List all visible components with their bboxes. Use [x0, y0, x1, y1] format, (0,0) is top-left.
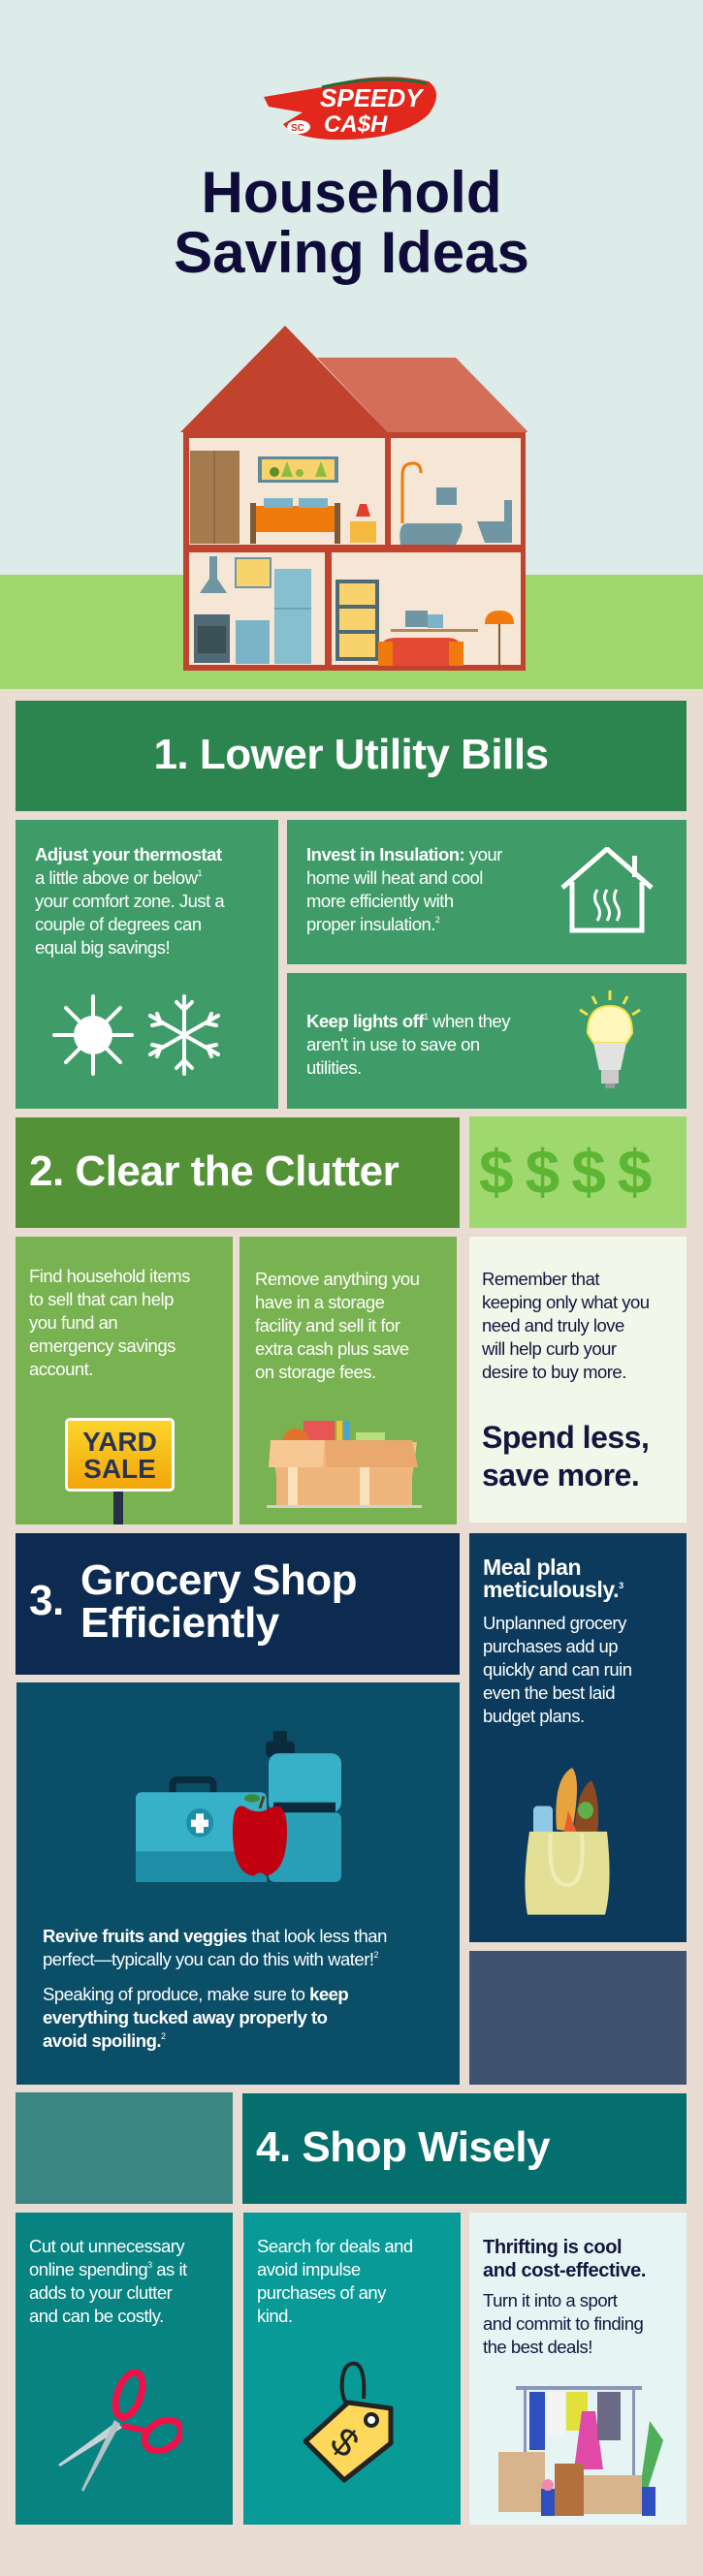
card: deals: purchases of any — [257, 2282, 386, 2303]
card: sell items: Find household items — [29, 1266, 190, 1286]
section 2 heading: 2. Clear the Clutter — [29, 1147, 399, 1195]
card: revive produce: perfect—typically you can do this with water!2 — [43, 1949, 378, 1969]
icon: clothes rack and boxes — [498, 2386, 663, 2516]
card: thrifting: Thrifting is cool — [483, 2237, 622, 2258]
card: storage: Remove anything you — [255, 1269, 419, 1289]
card: insulation: Invest in Insulation: your — [306, 844, 502, 864]
card: meal plan: purchases add up — [483, 1636, 618, 1656]
top sky background — [0, 0, 703, 575]
card: meal plan: Meal plan — [483, 1555, 581, 1580]
card: storage: facility and sell it for — [255, 1315, 399, 1335]
icon: price tag: $ — [323, 2419, 367, 2466]
card: online spending: and can be costly. — [29, 2306, 164, 2326]
card: lights off: aren't in use to save on — [306, 1034, 480, 1054]
card: thermostat: your comfort zone. Just a — [35, 891, 224, 911]
card: revive produce: Speaking of produce, make sure to keep — [43, 1984, 348, 2004]
callout: spend less save more: save more. — [482, 1458, 639, 1492]
card: online spending — [16, 2213, 233, 2525]
card: thrifting — [469, 2213, 687, 2525]
card: sell items: you fund an — [29, 1312, 117, 1333]
card: meal plan: quickly and can ruin — [483, 1659, 632, 1680]
card: insulation — [287, 820, 687, 964]
icon: yard sale sign: SALE — [83, 1454, 156, 1484]
card: insulation: proper insulation.2 — [306, 914, 439, 934]
card: revive produce: avoid spoiling.2 — [43, 2030, 166, 2051]
card: revive produce: everything tucked away properly to — [43, 2007, 327, 2027]
icon: box of items — [267, 1421, 422, 1508]
icon: yard sale sign — [65, 1418, 175, 1524]
callout: spend less save more — [482, 1420, 649, 1492]
card: storage: on storage fees. — [255, 1362, 376, 1382]
section 1 heading — [16, 701, 687, 811]
card: deals: Search for deals and — [257, 2236, 413, 2256]
card: meal plan: Unplanned grocery — [483, 1613, 626, 1633]
section 3 heading: Efficiently — [80, 1599, 279, 1647]
title: Saving Ideas — [174, 220, 529, 285]
section 2 heading — [16, 1117, 460, 1228]
section 1 heading: 1. Lower Utility Bills — [153, 731, 549, 778]
card: storage: have in a storage — [255, 1292, 384, 1312]
card: spend less: desire to buy more. — [482, 1362, 626, 1382]
card: storage: extra cash plus save — [255, 1338, 409, 1359]
title — [174, 160, 529, 285]
card: online spending: Cut out unnecessary — [29, 2236, 184, 2256]
card: spend less — [469, 1237, 687, 1523]
card: thermostat: couple of degrees can — [35, 914, 202, 934]
card: insulation: more efficiently with — [306, 891, 454, 911]
icon: yard sale sign: YARD — [82, 1427, 157, 1457]
card: thrifting: the best deals! — [483, 2337, 592, 2357]
card: insulation: home will heat and cool — [306, 867, 483, 888]
icon: price tag — [303, 2361, 394, 2483]
card: sell items: emergency savings — [29, 1335, 176, 1356]
panel: dollar signs — [469, 1116, 687, 1228]
card: lights off: Keep lights off1 when they — [306, 1011, 510, 1031]
card: online spending: adds to your clutter — [29, 2282, 172, 2303]
section 3 heading: 3. — [29, 1577, 64, 1624]
icon: grocery bag — [525, 1768, 610, 1915]
icon: sun and snowflake — [52, 994, 221, 1076]
section 4 heading: 4. Shop Wisely — [256, 2123, 550, 2171]
card: thrifting: Turn it into a sport — [483, 2290, 617, 2310]
icon: scissors — [58, 2369, 182, 2492]
logo: Speedy Cash: SPEEDY — [320, 83, 425, 112]
title: Household — [202, 160, 502, 225]
icon: lunchbox, bottle and apple — [136, 1731, 341, 1882]
house illustration — [180, 326, 527, 671]
card: thrifting: and cost-effective. — [483, 2260, 646, 2281]
card: spend less: will help curb your — [482, 1338, 617, 1359]
card: thermostat: equal big savings! — [35, 937, 170, 958]
section 3 heading: Grocery Shop — [80, 1556, 357, 1604]
green ground band — [0, 575, 703, 689]
card: deals: kind. — [257, 2306, 293, 2326]
card: meal plan: even the best laid — [483, 1682, 615, 1703]
card: deals — [243, 2213, 461, 2525]
section 3 heading — [16, 1533, 460, 1675]
card: revive produce: Revive fruits and veggies that look less than — [43, 1926, 387, 1946]
panel: dollar signs: $$$$ — [479, 1137, 663, 1207]
card: meal plan: budget plans. — [483, 1706, 585, 1726]
logo: Speedy Cash: CA$H — [324, 111, 388, 138]
card: sell items: to sell that can help — [29, 1289, 174, 1309]
card: meal plan — [469, 1533, 687, 1942]
logo: Speedy Cash: SC — [291, 123, 304, 134]
section 4 heading — [242, 2093, 687, 2204]
card: lights off: utilities. — [306, 1057, 362, 1078]
logo: Speedy Cash — [264, 77, 436, 140]
card: deals: avoid impulse — [257, 2259, 361, 2279]
card: sell items — [16, 1237, 233, 1524]
panel: slate filler — [469, 1951, 687, 2085]
card: spend less: keeping only what you — [482, 1292, 650, 1312]
card: online spending: online spending3 as it — [29, 2259, 187, 2279]
card: storage — [240, 1237, 457, 1524]
panel: teal filler — [16, 2092, 233, 2204]
card: meal plan: meticulously.3 — [483, 1577, 623, 1602]
card: revive produce — [16, 1682, 460, 2085]
card: spend less: Remember that — [482, 1269, 599, 1289]
callout: spend less save more: Spend less, — [482, 1420, 649, 1455]
card: thermostat: a little above or below1 — [35, 867, 202, 888]
icon: house with heat — [560, 847, 654, 932]
card: thermostat: Adjust your thermostat — [35, 844, 222, 864]
card: spend less: need and truly love — [482, 1315, 624, 1335]
card: thermostat — [16, 820, 278, 1109]
icon: light bulb — [579, 990, 641, 1088]
card: thrifting: and commit to finding — [483, 2313, 643, 2334]
card: sell items: account. — [29, 1359, 93, 1379]
card: lights off — [287, 973, 687, 1109]
